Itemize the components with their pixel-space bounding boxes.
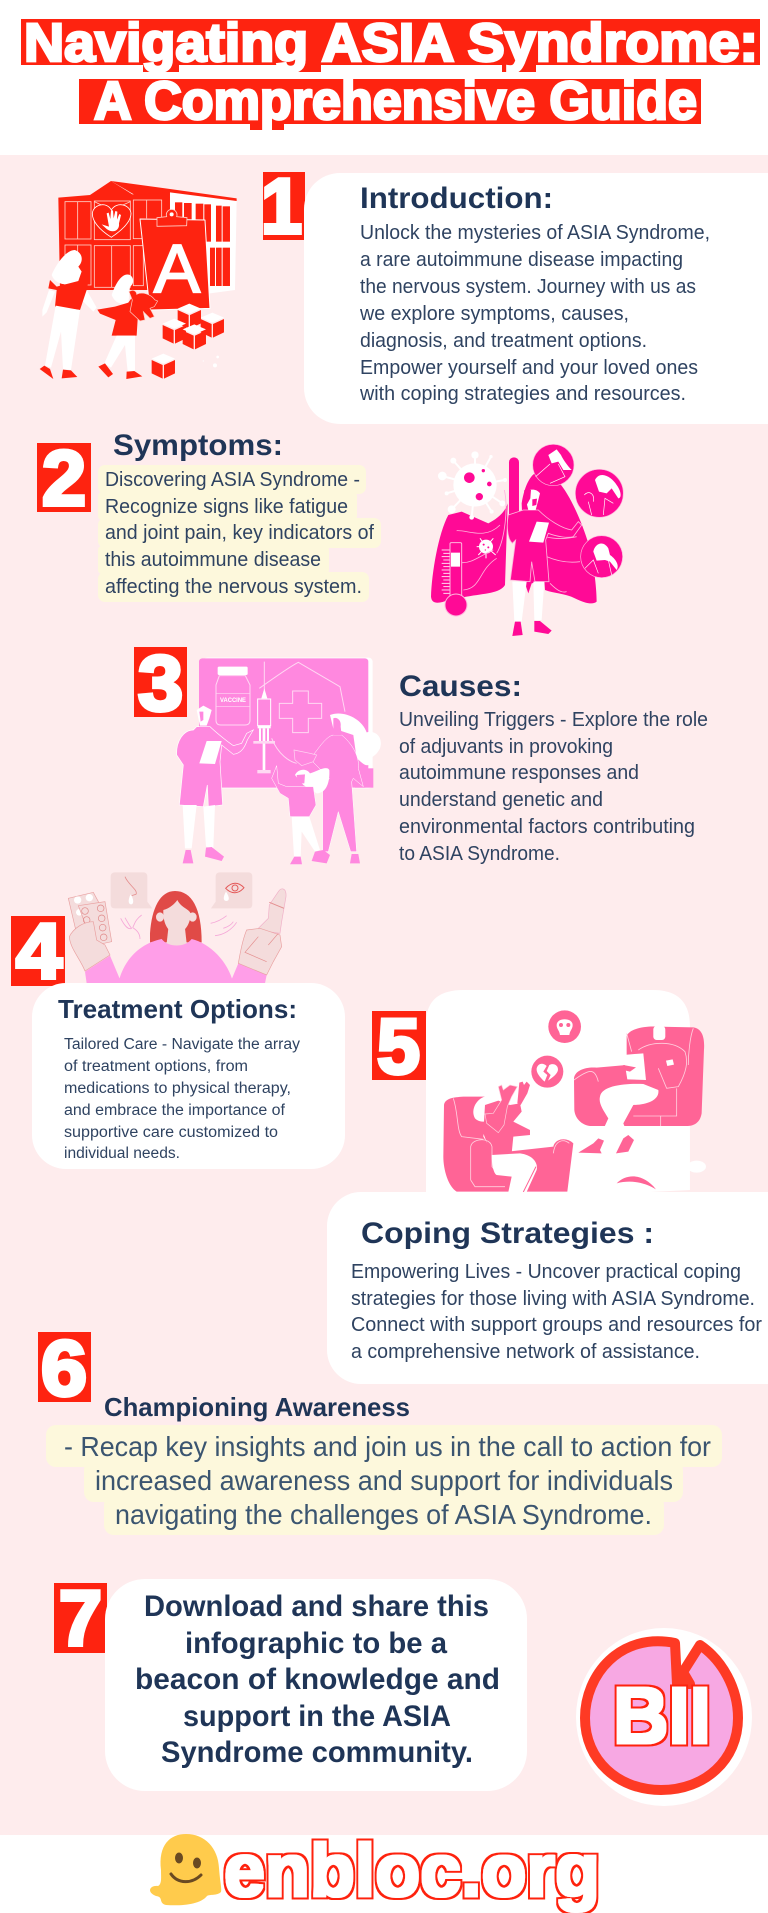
panel: introduction: the nervous system. Journey with us as — [360, 276, 696, 298]
illustration: family at hospital: A — [154, 231, 201, 307]
panel: symptoms: and joint pain, key indicators of — [105, 522, 374, 544]
panel: causes: Causes: — [399, 670, 522, 703]
panel: treatment options: and embrace the importance of — [64, 1102, 286, 1119]
panel: causes — [399, 670, 708, 865]
panel: introduction: a rare autoimmune disease impacting — [360, 249, 683, 271]
title: A Comprehensive Guide — [94, 71, 697, 131]
number badge 6: 6 — [41, 1324, 87, 1412]
illustration: vaccine and family — [177, 658, 381, 864]
panel: coping strategies — [327, 1192, 768, 1384]
number badge 5: 5 — [377, 1002, 420, 1090]
footer brand text: enbloc.org — [224, 1829, 600, 1912]
panel: championing awareness: Championing Awareness — [104, 1392, 410, 1422]
panel: treatment options — [32, 983, 345, 1169]
panel: symptoms: this autoimmune disease — [105, 549, 321, 571]
panel: call to action: Download and share this — [144, 1590, 489, 1623]
panel: symptoms: Discovering ASIA Syndrome - — [105, 469, 360, 491]
panel: causes: Unveiling Triggers - Explore the role — [399, 709, 708, 731]
panel: treatment options: Tailored Care - Navigate the array — [64, 1036, 300, 1053]
panel: causes: to ASIA Syndrome. — [399, 843, 560, 865]
panel: championing awareness — [46, 1392, 722, 1535]
panel: treatment options: medications to physical therapy, — [64, 1080, 291, 1097]
panel: introduction: Introduction: — [360, 182, 553, 215]
panel: causes: of adjuvants in provoking — [399, 736, 613, 758]
number badge 4: 4 — [16, 907, 62, 995]
logo: BII badge — [576, 1628, 752, 1806]
panel: call to action: Syndrome community. — [161, 1736, 473, 1769]
number badge 7: 7 — [59, 1574, 102, 1662]
panel: call to action: infographic to be a — [185, 1627, 447, 1660]
panel: introduction — [304, 173, 768, 424]
panel: introduction: diagnosis, and treatment options. — [360, 330, 647, 352]
panel: treatment options: supportive care customized to — [64, 1124, 278, 1141]
panel: championing awareness: increased awareness and support for individuals — [95, 1465, 673, 1496]
title — [21, 13, 760, 131]
panel: treatment options: of treatment options, from — [64, 1058, 248, 1075]
panel: coping strategies: Coping Strategies : — [361, 1217, 654, 1250]
title: Navigating ASIA Syndrome: — [24, 13, 758, 73]
icon: melting face emoji — [150, 1834, 221, 1905]
panel: treatment options: Treatment Options: — [58, 994, 297, 1024]
panel: coping strategies: Connect with support groups and resources for — [351, 1314, 762, 1336]
number badge 2: 2 — [42, 434, 86, 522]
panel: call to action: beacon of knowledge and — [135, 1663, 500, 1696]
panel: championing awareness: - Recap key insights and join us in the call to action for — [64, 1431, 711, 1462]
illustration: treatment person with pills and spray — [68, 872, 286, 983]
panel: call to action — [105, 1579, 527, 1791]
number badge 3: 3 — [138, 639, 183, 727]
panel: call to action: support in the ASIA — [183, 1700, 451, 1733]
logo: BII badge: BII — [613, 1671, 711, 1760]
panel: introduction: Empower yourself and your loved ones — [360, 357, 698, 379]
panel: causes: understand genetic and — [399, 789, 603, 811]
illustration: therapy session — [426, 990, 706, 1203]
panel: causes: environmental factors contributing — [399, 816, 695, 838]
panel: treatment options: individual needs. — [64, 1145, 180, 1162]
panel: symptoms: affecting the nervous system. — [105, 576, 362, 598]
panel: symptoms: Symptoms: — [113, 429, 283, 462]
panel: championing awareness: navigating the challenges of ASIA Syndrome. — [115, 1499, 652, 1530]
panel: introduction: Unlock the mysteries of ASIA Syndrome, — [360, 222, 710, 244]
panel: symptoms: Recognize signs like fatigue — [105, 496, 348, 518]
number badge 1: 1 — [261, 162, 302, 250]
panel: causes: autoimmune responses and — [399, 762, 639, 784]
panel: coping strategies: a comprehensive network of assistance. — [351, 1341, 700, 1363]
illustration: lungs and doctor — [431, 444, 623, 636]
panel: coping strategies: Empowering Lives - Uncover practical coping — [351, 1261, 741, 1283]
panel: introduction: we explore symptoms, causes, — [359, 303, 629, 325]
illustration: vaccine and family: VACCINE — [220, 698, 246, 704]
panel: introduction: with coping strategies and resources. — [359, 383, 686, 405]
illustration: family at hospital — [40, 181, 237, 379]
panel: symptoms — [98, 429, 381, 602]
panel: coping strategies: strategies for those living with ASIA Syndrome. — [351, 1288, 755, 1310]
